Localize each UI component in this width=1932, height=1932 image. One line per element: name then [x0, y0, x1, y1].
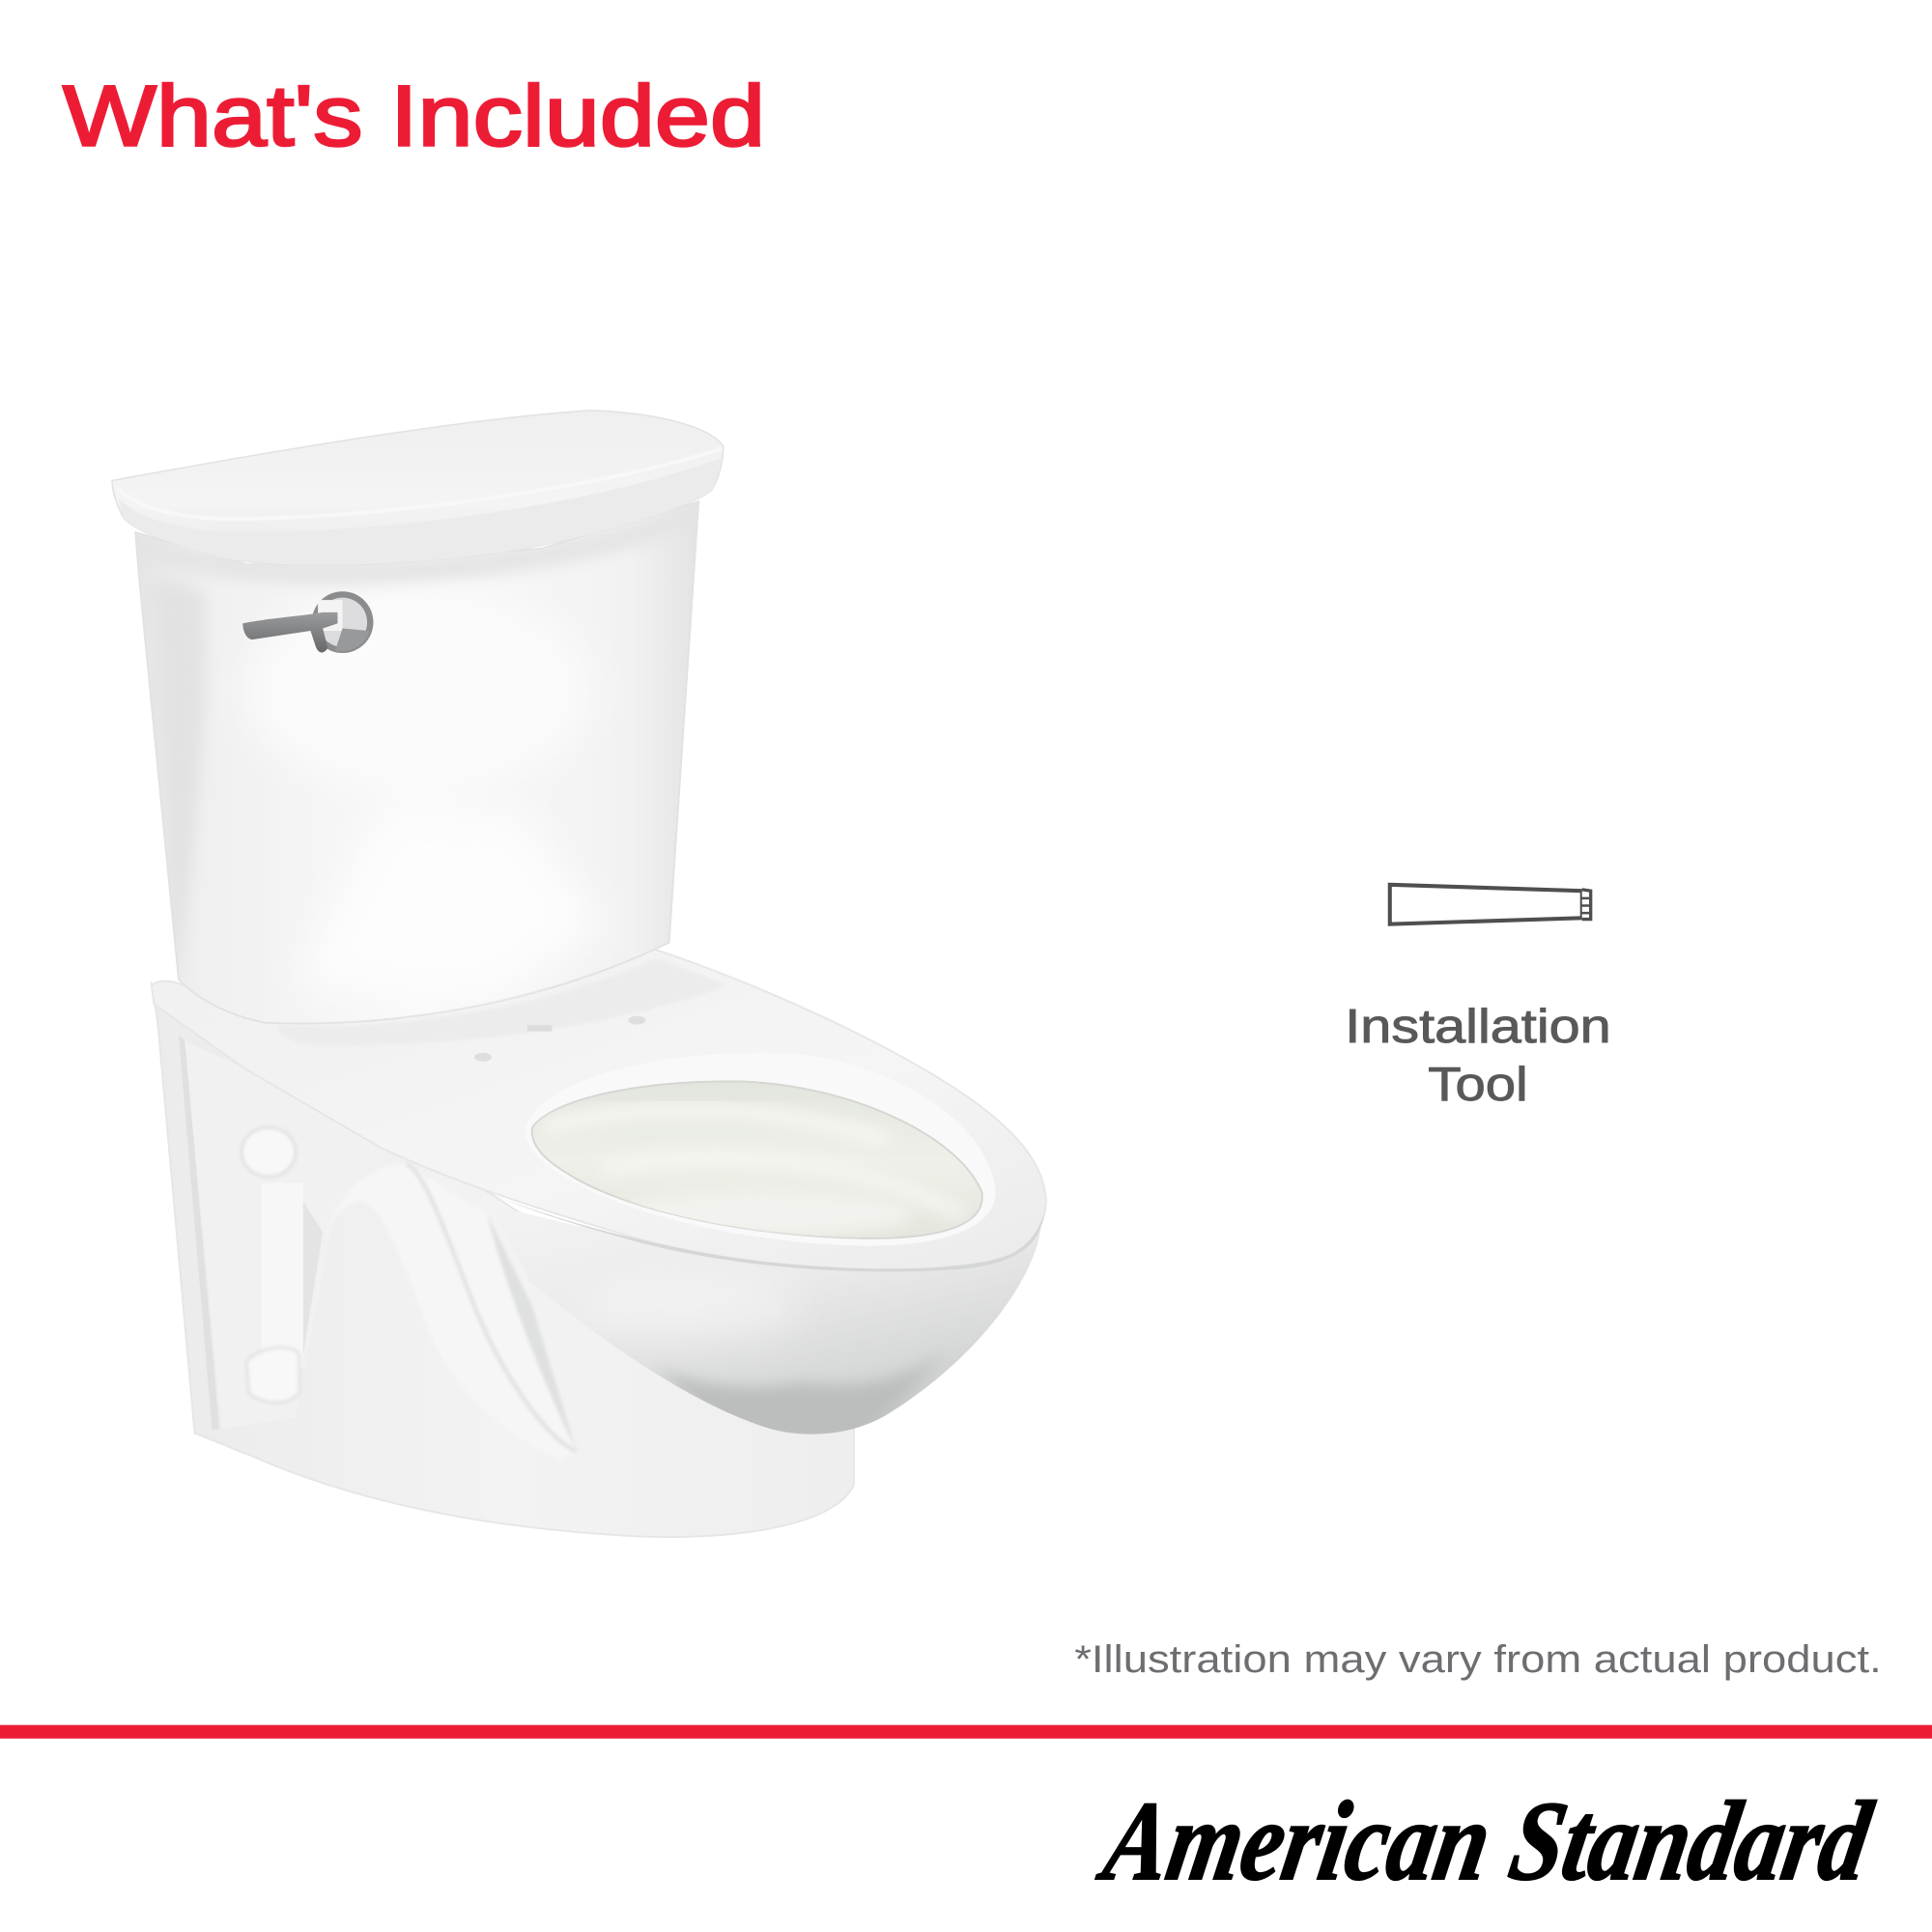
bowl rim and top plate [152, 949, 1046, 1271]
bowl exterior [517, 1211, 1041, 1435]
tank lid [112, 411, 724, 565]
seat holes and brand mark [474, 1016, 645, 1062]
footnote: *Illustration may vary from actual product. [1074, 1637, 1882, 1681]
installation tool label: Tool [1428, 1059, 1528, 1111]
flush handle [242, 591, 373, 653]
back wall mount [152, 983, 854, 1537]
toilet illustration [112, 411, 1046, 1537]
installation tool label [1345, 1001, 1611, 1111]
installation tool label: Installation [1345, 1001, 1611, 1053]
title: What's Included [63, 68, 765, 164]
wall-mount ribs and bosses [242, 1127, 323, 1403]
tank body [135, 501, 698, 1023]
bowl opening [531, 1080, 995, 1246]
icon: installation tool [1390, 885, 1591, 924]
divider bar [0, 1725, 1932, 1739]
trapway wave [323, 1164, 577, 1460]
